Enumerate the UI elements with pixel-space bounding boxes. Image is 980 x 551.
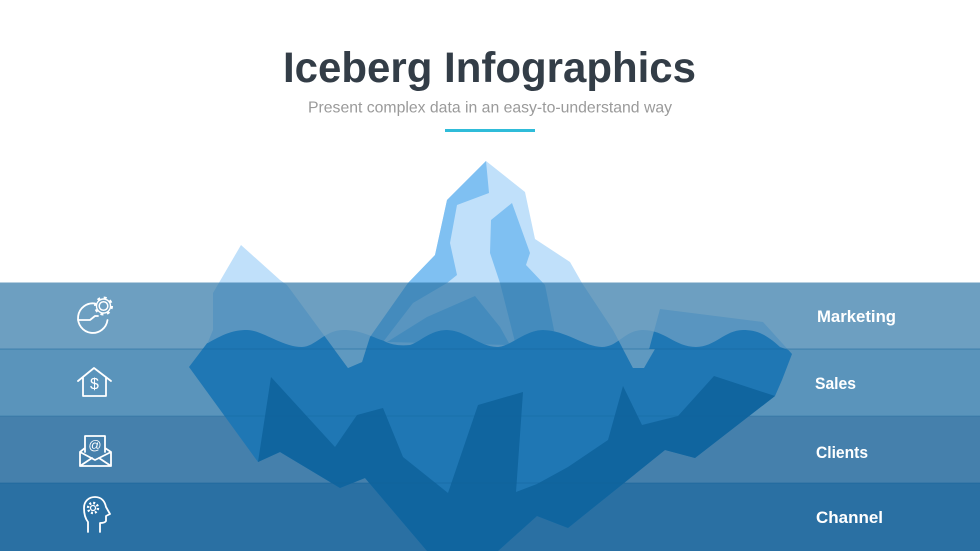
label: marketing: Marketing — [817, 307, 896, 326]
band: channel — [0, 483, 980, 551]
heading block — [283, 44, 696, 132]
label: clients: Clients — [816, 443, 868, 462]
label: channel: Channel — [816, 508, 883, 527]
subtitle: Present complex data in an easy-to-understand way — [308, 100, 672, 116]
notch left — [334, 349, 366, 368]
iceberg light body — [189, 161, 792, 380]
band: sales — [0, 349, 980, 416]
water surface wave — [208, 330, 780, 349]
icon: envelope with at sign — [80, 436, 111, 466]
band: clients — [0, 416, 980, 483]
icon: head with gear — [84, 497, 110, 532]
submerged iceberg — [180, 330, 800, 551]
band: marketing — [0, 282, 980, 349]
label: sales: Sales — [815, 374, 856, 393]
right peak facet — [490, 203, 555, 342]
title: Iceberg Infographics — [283, 44, 696, 92]
left peak facet — [370, 161, 489, 342]
icon: house with dollar: $ — [90, 376, 99, 393]
icon: house with dollar — [78, 368, 111, 396]
icon: clock with gear — [78, 298, 112, 333]
submerged mass — [189, 330, 792, 493]
accent bar — [445, 129, 535, 132]
iceberg tip above water — [189, 161, 792, 380]
lower centre facet — [387, 296, 510, 345]
icon: envelope with at sign: @ — [88, 438, 102, 452]
band dividers — [0, 349, 980, 483]
deep facets — [258, 376, 775, 551]
notch right — [623, 349, 655, 368]
